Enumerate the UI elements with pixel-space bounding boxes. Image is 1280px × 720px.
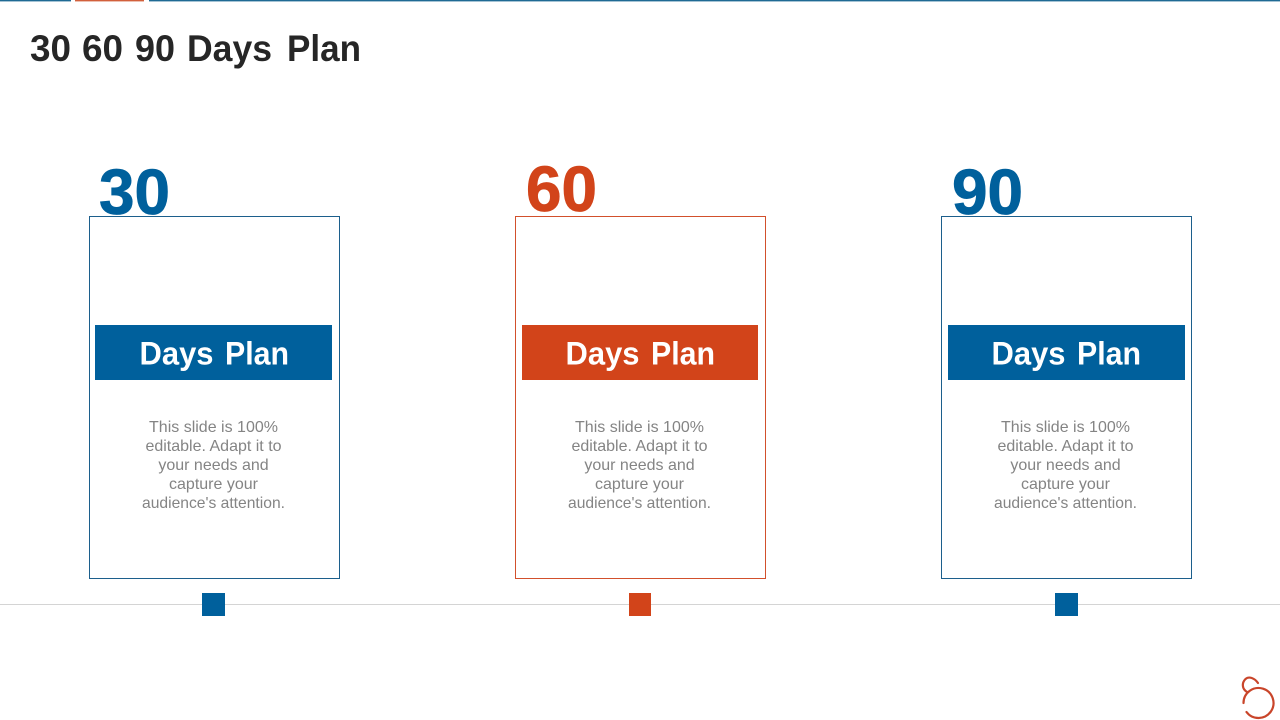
description text — [994, 419, 1137, 512]
title: Plan — [287, 28, 361, 69]
description text: your needs and — [584, 457, 695, 474]
description text: editable. Adapt it to — [571, 438, 708, 455]
description text: editable. Adapt it to — [997, 438, 1134, 455]
description text: This slide is 100% — [149, 419, 278, 436]
heading band: Plan — [225, 336, 289, 372]
timeline marker — [202, 593, 225, 616]
heading band: Plan — [651, 336, 715, 372]
description text: capture your — [169, 476, 259, 493]
description text: your needs and — [1010, 457, 1121, 474]
title: 30 — [30, 28, 71, 69]
card outline — [516, 216, 766, 578]
description text: your needs and — [158, 457, 269, 474]
description text: audience's attention. — [568, 495, 711, 512]
description text: audience's attention. — [142, 495, 285, 512]
description text: This slide is 100% — [575, 419, 704, 436]
title: 60 — [82, 28, 123, 69]
description text — [568, 419, 711, 512]
description text: audience's attention. — [994, 495, 1137, 512]
heading band — [948, 325, 1185, 380]
icon: corner logo — [1243, 678, 1273, 718]
top accent rule — [0, 0, 1280, 1]
card outline — [90, 216, 340, 578]
title: 90 — [135, 28, 175, 69]
panel: 30 days — [90, 156, 340, 616]
description text: editable. Adapt it to — [145, 438, 282, 455]
heading band: Plan — [1077, 336, 1141, 372]
number 60: 60 — [526, 153, 597, 225]
timeline marker — [1055, 593, 1078, 616]
heading band: Days — [566, 336, 640, 372]
description text — [142, 419, 285, 512]
title: Days — [187, 28, 272, 69]
title — [30, 28, 361, 69]
description text: capture your — [1021, 476, 1111, 493]
number 30: 30 — [99, 156, 170, 228]
timeline line — [0, 604, 1280, 605]
description text: This slide is 100% — [1001, 419, 1130, 436]
description text: capture your — [595, 476, 685, 493]
heading band: Days — [992, 336, 1066, 372]
panel: 90 days — [942, 156, 1192, 616]
number 90: 90 — [952, 156, 1023, 228]
heading band — [95, 325, 332, 380]
heading band: Days — [140, 336, 214, 372]
heading band — [522, 325, 758, 380]
card outline — [942, 216, 1192, 578]
panel: 60 days — [516, 153, 766, 616]
timeline marker — [629, 593, 651, 616]
